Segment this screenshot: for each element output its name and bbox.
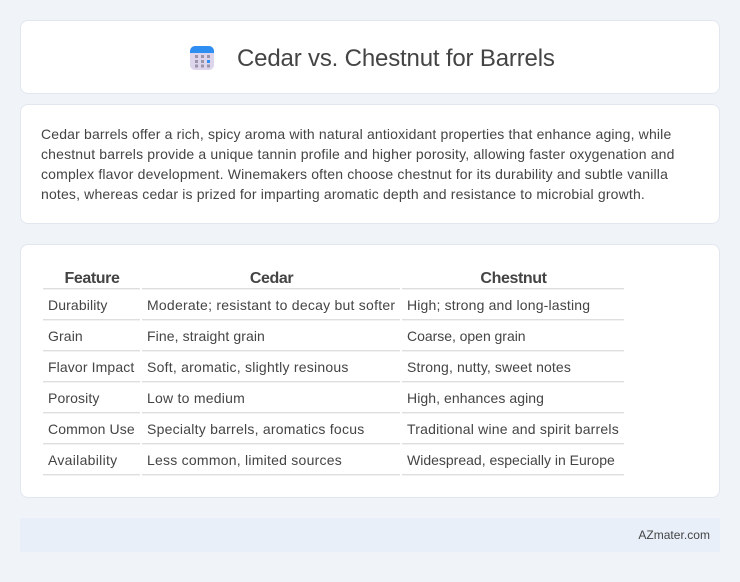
- row: durability: [48, 297, 590, 313]
- row: porosity: High, enhances aging: [407, 390, 544, 406]
- row: common use: [48, 421, 619, 437]
- row: grain: Grain: [48, 328, 83, 344]
- icon: calendar: [190, 46, 214, 70]
- table header: Chestnut: [480, 270, 547, 287]
- table header: [64, 270, 547, 287]
- row: availability: Less common, limited sources: [147, 452, 342, 468]
- table header: Cedar: [250, 270, 293, 287]
- panel: description: [20, 104, 720, 224]
- row: porosity: Low to medium: [147, 390, 245, 406]
- row: flavor impact: Soft, aromatic, slightly resinous: [147, 359, 349, 375]
- row: flavor impact: Strong, nutty, sweet notes: [407, 359, 571, 375]
- row: flavor impact: [48, 359, 571, 375]
- row: grain: Coarse, open grain: [407, 328, 526, 344]
- footer credit: AZmater.com: [638, 528, 710, 542]
- text block: description: chestnut barrels provide a unique tannin profile and higher porosity, allowing faster oxygenation and: [41, 146, 675, 162]
- header panel: [20, 20, 720, 94]
- row: grain: Fine, straight grain: [147, 328, 265, 344]
- row: availability: [48, 452, 615, 468]
- row: durability: High; strong and long-lasting: [407, 297, 590, 313]
- footer bar: [20, 518, 720, 552]
- row: availability: Widespread, especially in Europe: [407, 452, 615, 468]
- row: common use: Specialty barrels, aromatics focus: [147, 421, 364, 437]
- row: flavor impact: Flavor Impact: [48, 359, 134, 375]
- text block: description: [41, 126, 675, 202]
- row: common use: Common Use: [48, 421, 135, 437]
- row: porosity: Porosity: [48, 390, 100, 406]
- text block: description: Cedar barrels offer a rich, spicy aroma with natural antioxidant properties that enhance aging, while: [41, 126, 671, 142]
- row: availability: Availability: [48, 452, 118, 468]
- row: durability: Moderate; resistant to decay but softer: [147, 297, 395, 313]
- panel: comparison table: [20, 244, 720, 498]
- row: common use: Traditional wine and spirit barrels: [407, 421, 619, 437]
- text block: description: notes, whereas cedar is prized for imparting aromatic depth and resistance to microbial growth.: [41, 186, 645, 202]
- row: durability: Durability: [48, 297, 108, 313]
- title: Cedar vs. Chestnut for Barrels: [237, 45, 555, 72]
- text block: description: complex flavor development. Winemakers often choose chestnut for its durability and subtle vanilla: [41, 166, 668, 182]
- row: grain: [48, 328, 526, 344]
- row: porosity: [48, 390, 544, 406]
- table header: Feature: [64, 270, 120, 287]
